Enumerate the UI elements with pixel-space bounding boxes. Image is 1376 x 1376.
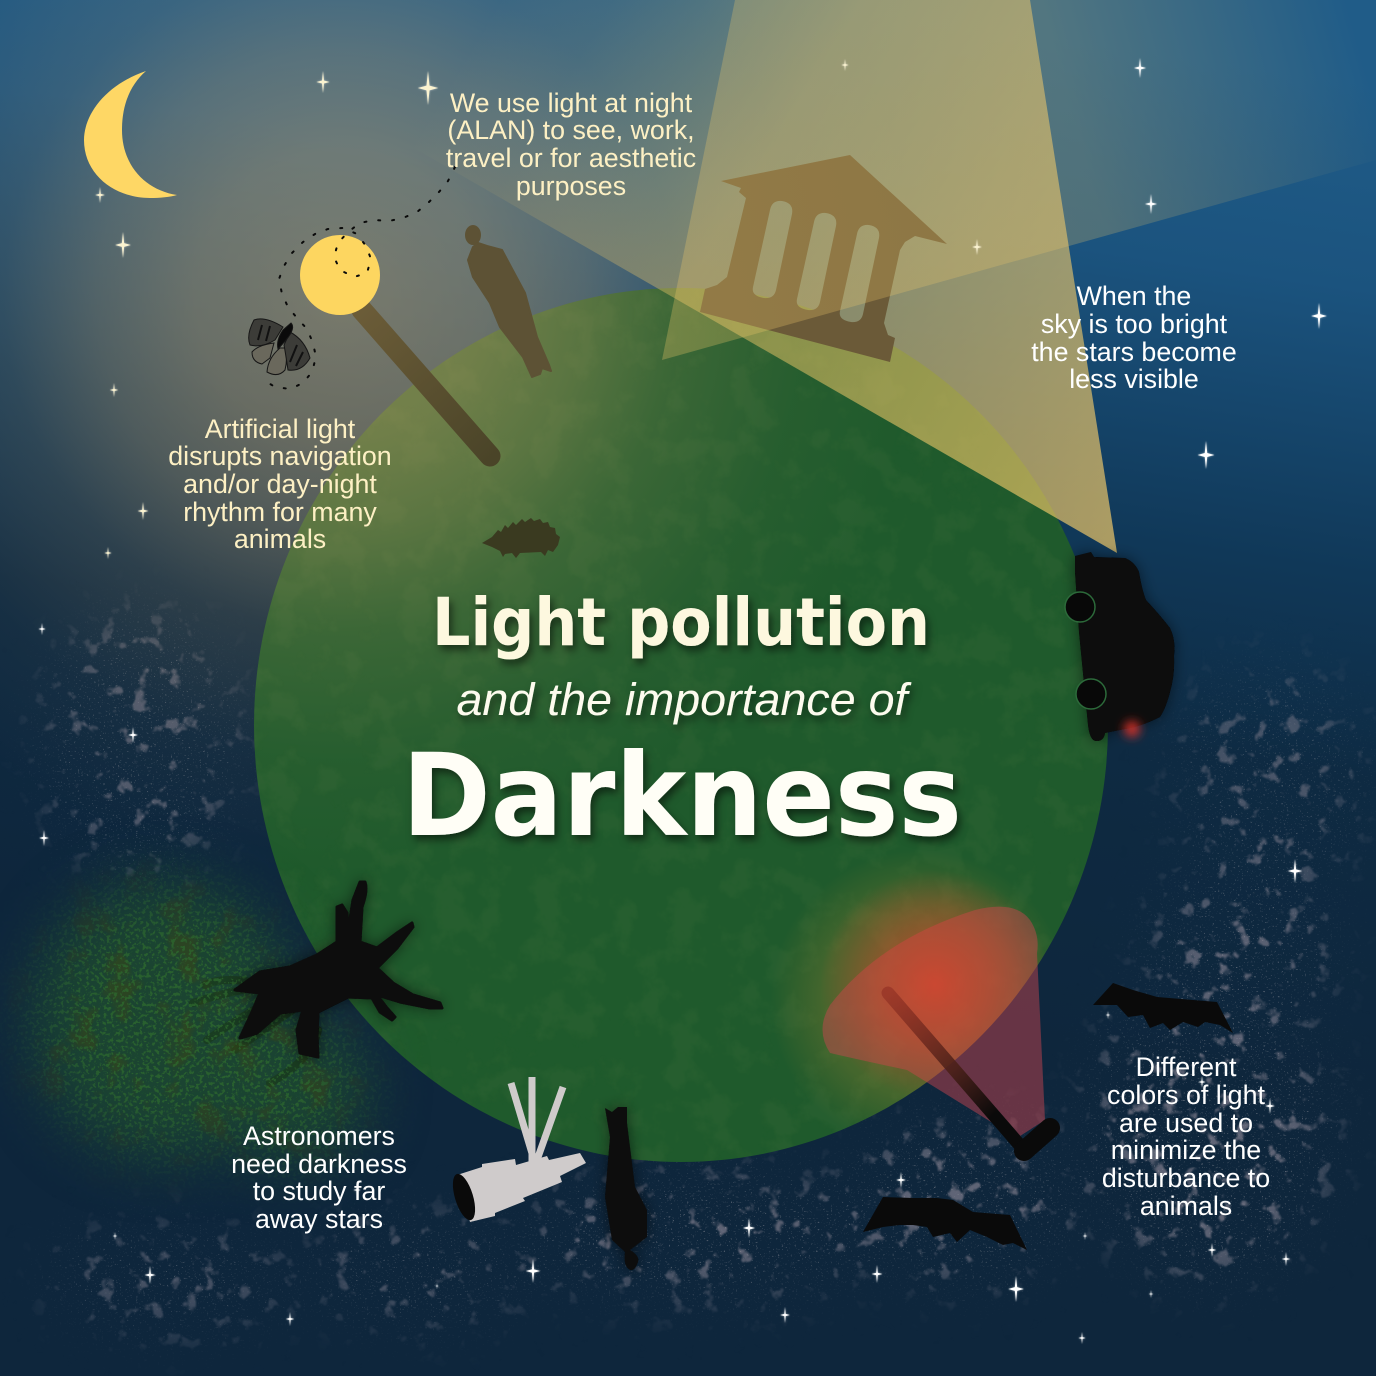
text: ALAN uses: purposes xyxy=(516,171,626,201)
title xyxy=(402,584,962,862)
text: ALAN uses: We use light at night xyxy=(450,88,693,118)
text: colors of light: Different xyxy=(1136,1052,1237,1082)
planet xyxy=(240,280,1120,1162)
text: astronomers: to study far xyxy=(253,1176,385,1206)
green vegetation spray xyxy=(8,858,389,1185)
text: astronomers: away stars xyxy=(255,1204,383,1234)
icon: moth xyxy=(249,319,310,375)
icon: red lamp xyxy=(770,850,1070,1151)
text: animal disruption: and/or day-night xyxy=(183,469,377,499)
icon: street lamp xyxy=(300,235,490,456)
text: ALAN uses: travel or for aesthetic xyxy=(446,143,696,173)
icon: tree xyxy=(235,882,442,1057)
title: Light pollution xyxy=(432,584,930,661)
text: colors of light: disturbance to xyxy=(1102,1163,1270,1193)
tree roots xyxy=(193,980,318,1083)
text: animal disruption: disrupts navigation xyxy=(168,441,392,471)
light beam towards the sky xyxy=(662,0,1376,360)
icon: cat silhouette xyxy=(605,1107,647,1270)
title: and the importance of xyxy=(456,674,912,725)
icon: hedgehog xyxy=(482,518,560,558)
text: colors of light: animals xyxy=(1140,1191,1232,1221)
text: ALAN uses: (ALAN) to see, work, xyxy=(447,115,695,145)
icon: car xyxy=(1065,552,1174,741)
icon: crescent moon xyxy=(84,71,177,198)
text: bright sky: sky is too bright xyxy=(1041,309,1228,339)
text: bright sky: When the xyxy=(1077,281,1191,311)
text: colors of light: colors of light xyxy=(1107,1080,1265,1110)
text: colors of light: minimize the xyxy=(1111,1135,1261,1165)
title: Darkness xyxy=(402,729,962,862)
light beam from car headlights xyxy=(400,0,1117,553)
star dust texture xyxy=(20,594,1376,1356)
light glow from street lamp xyxy=(0,0,1376,900)
building silhouette xyxy=(700,155,947,362)
icon: upper bat xyxy=(1093,983,1233,1033)
text: bright sky: less visible xyxy=(1069,364,1199,394)
text: animal disruption: rhythm for many xyxy=(183,497,377,527)
icon: lower bat xyxy=(863,1197,1027,1250)
text: astronomers: need darkness xyxy=(231,1149,407,1179)
text: animal disruption: Artificial light xyxy=(205,414,356,444)
icon: telescope xyxy=(448,1077,586,1223)
text: bright sky: the stars become xyxy=(1031,337,1237,367)
text: animal disruption: animals xyxy=(234,524,326,554)
text: astronomers: Astronomers xyxy=(243,1121,395,1151)
moth flight path xyxy=(262,167,455,389)
icon: human silhouette xyxy=(466,226,551,377)
text: colors of light: are used to xyxy=(1119,1108,1253,1138)
